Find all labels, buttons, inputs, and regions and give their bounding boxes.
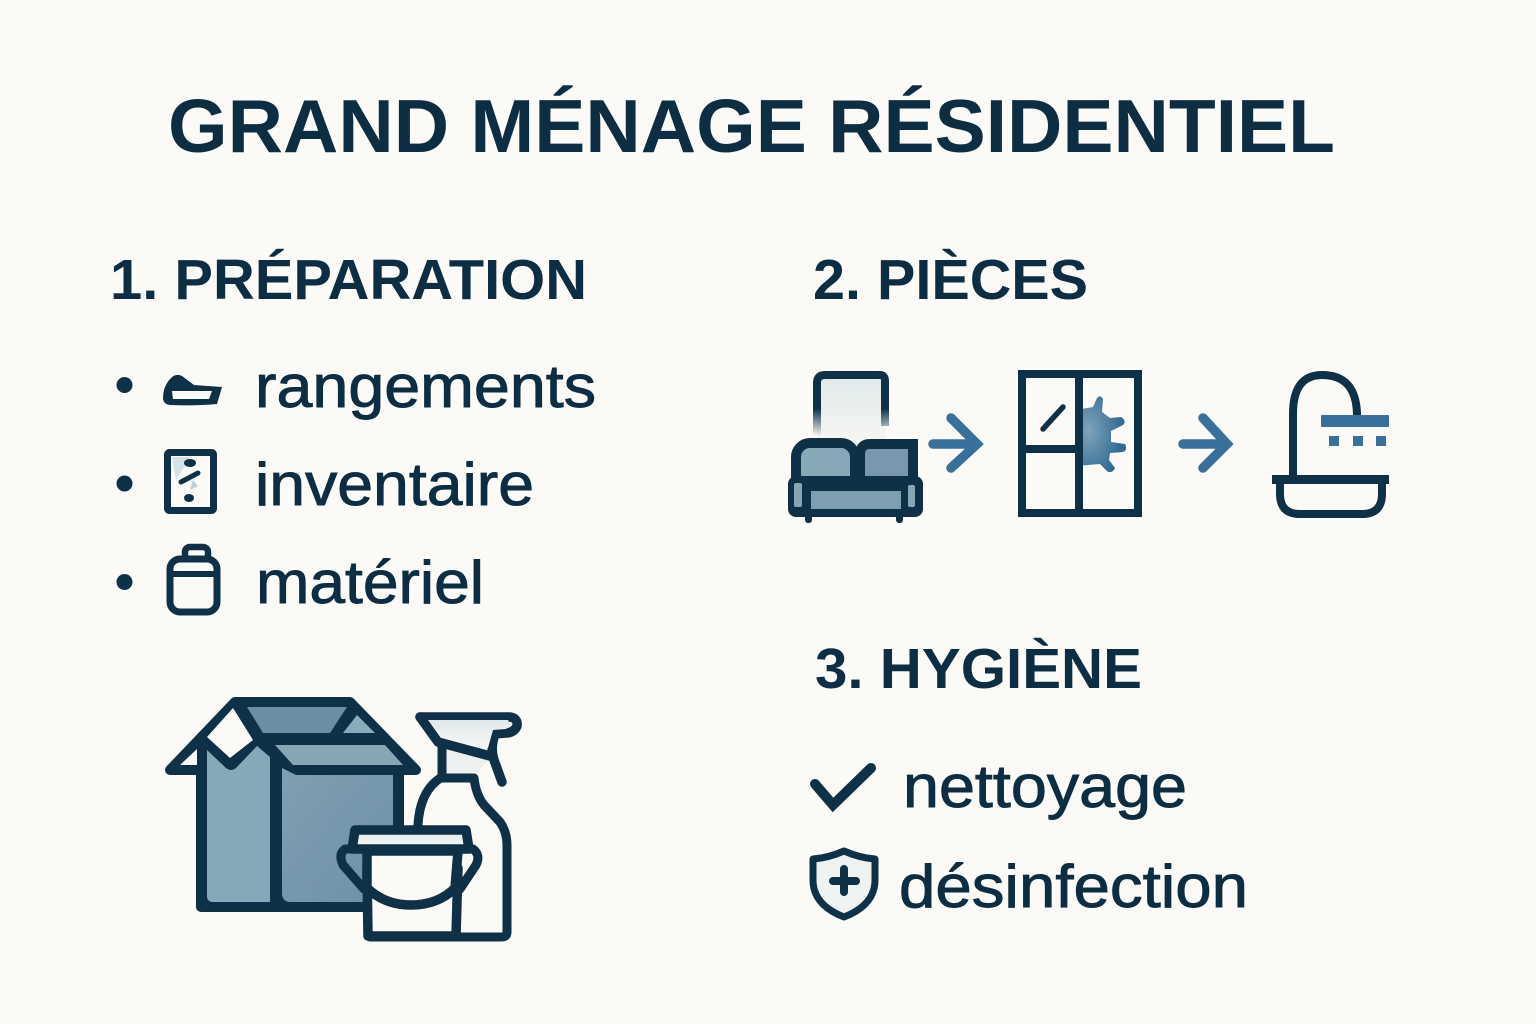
icon: window with sun (1022, 374, 1138, 513)
list item: désinfection: désinfection (899, 853, 1248, 920)
list item: rangements (116, 353, 596, 420)
heading: 3. hygiène: 3. HYGIÈNE (815, 637, 1142, 701)
bucket (341, 830, 478, 936)
list item: nettoyage: nettoyage (903, 753, 1187, 820)
heading: 1. préparation: 1. PRÉPARATION (110, 248, 587, 312)
title: GRAND MÉNAGE RÉSIDENTIEL (168, 84, 1335, 168)
arrow (1183, 418, 1227, 468)
list item: matériel: matériel (256, 549, 484, 616)
list item: rangements: rangements (255, 353, 596, 420)
list item: matériel (116, 547, 484, 616)
heading: 2. pièces: 2. PIÈCES (813, 248, 1088, 312)
icon: check mark (815, 768, 871, 805)
arrow (933, 418, 977, 468)
list item: inventaire (116, 451, 534, 518)
icon: sofa with mirror (788, 375, 923, 523)
icon: shield with cross (813, 851, 875, 917)
spray bottle (370, 717, 517, 937)
list item: inventaire: inventaire (255, 451, 534, 518)
icon: shower and tub (1272, 375, 1389, 514)
cardboard box (170, 702, 416, 907)
illustration: box, spray bottle and bucket (170, 702, 517, 937)
